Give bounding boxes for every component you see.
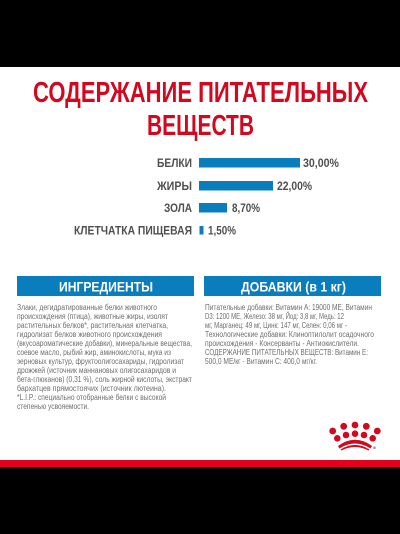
additives text	[205, 303, 374, 366]
ingredients text	[17, 303, 192, 411]
red footer stripe	[0, 460, 400, 467]
bottom black band	[0, 467, 400, 534]
bar chart: nutrient content	[74, 156, 339, 238]
additives text: происхождения - Консерванты - Антиокислители.	[205, 339, 359, 348]
row: fibre: 1,50%	[208, 224, 236, 238]
additives header	[204, 276, 381, 296]
title	[33, 77, 368, 142]
row: fibre: КЛЕТЧАТКА ПИЩЕВАЯ	[74, 224, 192, 238]
ingredients text: (вкусоароматические добавки), минеральные вещества,	[17, 339, 192, 348]
ingredients text: степенью усвояемости.	[17, 402, 89, 411]
row: fats: ЖИРЫ	[156, 179, 192, 193]
panel: additives	[204, 276, 381, 366]
ingredients text: бета-глюканов) (0,31 %), соль жирной кислоты, экстракт	[17, 375, 192, 384]
title: ВЕЩЕСТВ	[147, 110, 254, 142]
top black band	[0, 0, 400, 67]
ingredients text: зерновых культур, фруктоолигосахариды, гидролизат	[17, 357, 184, 366]
row: ash: ЗОЛА	[164, 201, 192, 215]
additives text: мг, Марганец: 49 мг, Цинк: 147 мг, Селен: 0,06 мг -	[205, 321, 347, 330]
additives text: D3: 1200 МЕ, Железо: 38 мг, Йод: 3,8 мг, Медь: 12	[205, 312, 344, 321]
row: proteins	[157, 156, 339, 170]
row: fats	[156, 179, 312, 193]
icon: royal crown logo	[329, 422, 381, 450]
row: proteins: 30,00%	[303, 156, 339, 170]
ingredients header: ИНГРЕДИЕНТЫ	[59, 278, 153, 294]
ingredients text: происхождения (птица), животные жиры, изолят	[17, 312, 168, 321]
ingredients header	[17, 276, 194, 296]
ingredients text: *L.I.P.: специально отобранные белки с высокой	[17, 393, 166, 402]
panel: ingredients	[17, 276, 194, 411]
ingredients text: растительных белков*, растительная клетчатка,	[17, 321, 168, 330]
ingredients text: дрожжей (источник маннановых олигосахаридов и	[17, 366, 176, 375]
ingredients text: соевое масло, рыбий жир, аминокислоты, мука из	[17, 348, 171, 357]
ingredients text: бархатцев прямостоячих (источник лютеина).	[17, 384, 166, 393]
row: ash: 8,70%	[232, 201, 260, 215]
ingredients text: гидролизат белков животного происхождения	[17, 330, 162, 339]
row: fats: 22,00%	[277, 179, 312, 193]
row: ash	[164, 201, 260, 215]
additives text: 500,0 МЕ/кг - Витамин C: 400,0 мг/кг.	[205, 357, 317, 366]
row: proteins: БЕЛКИ	[157, 156, 192, 170]
additives header: ДОБАВКИ (в 1 кг)	[241, 278, 346, 294]
ingredients text: Злаки, дегидратированные белки животного	[17, 303, 157, 312]
